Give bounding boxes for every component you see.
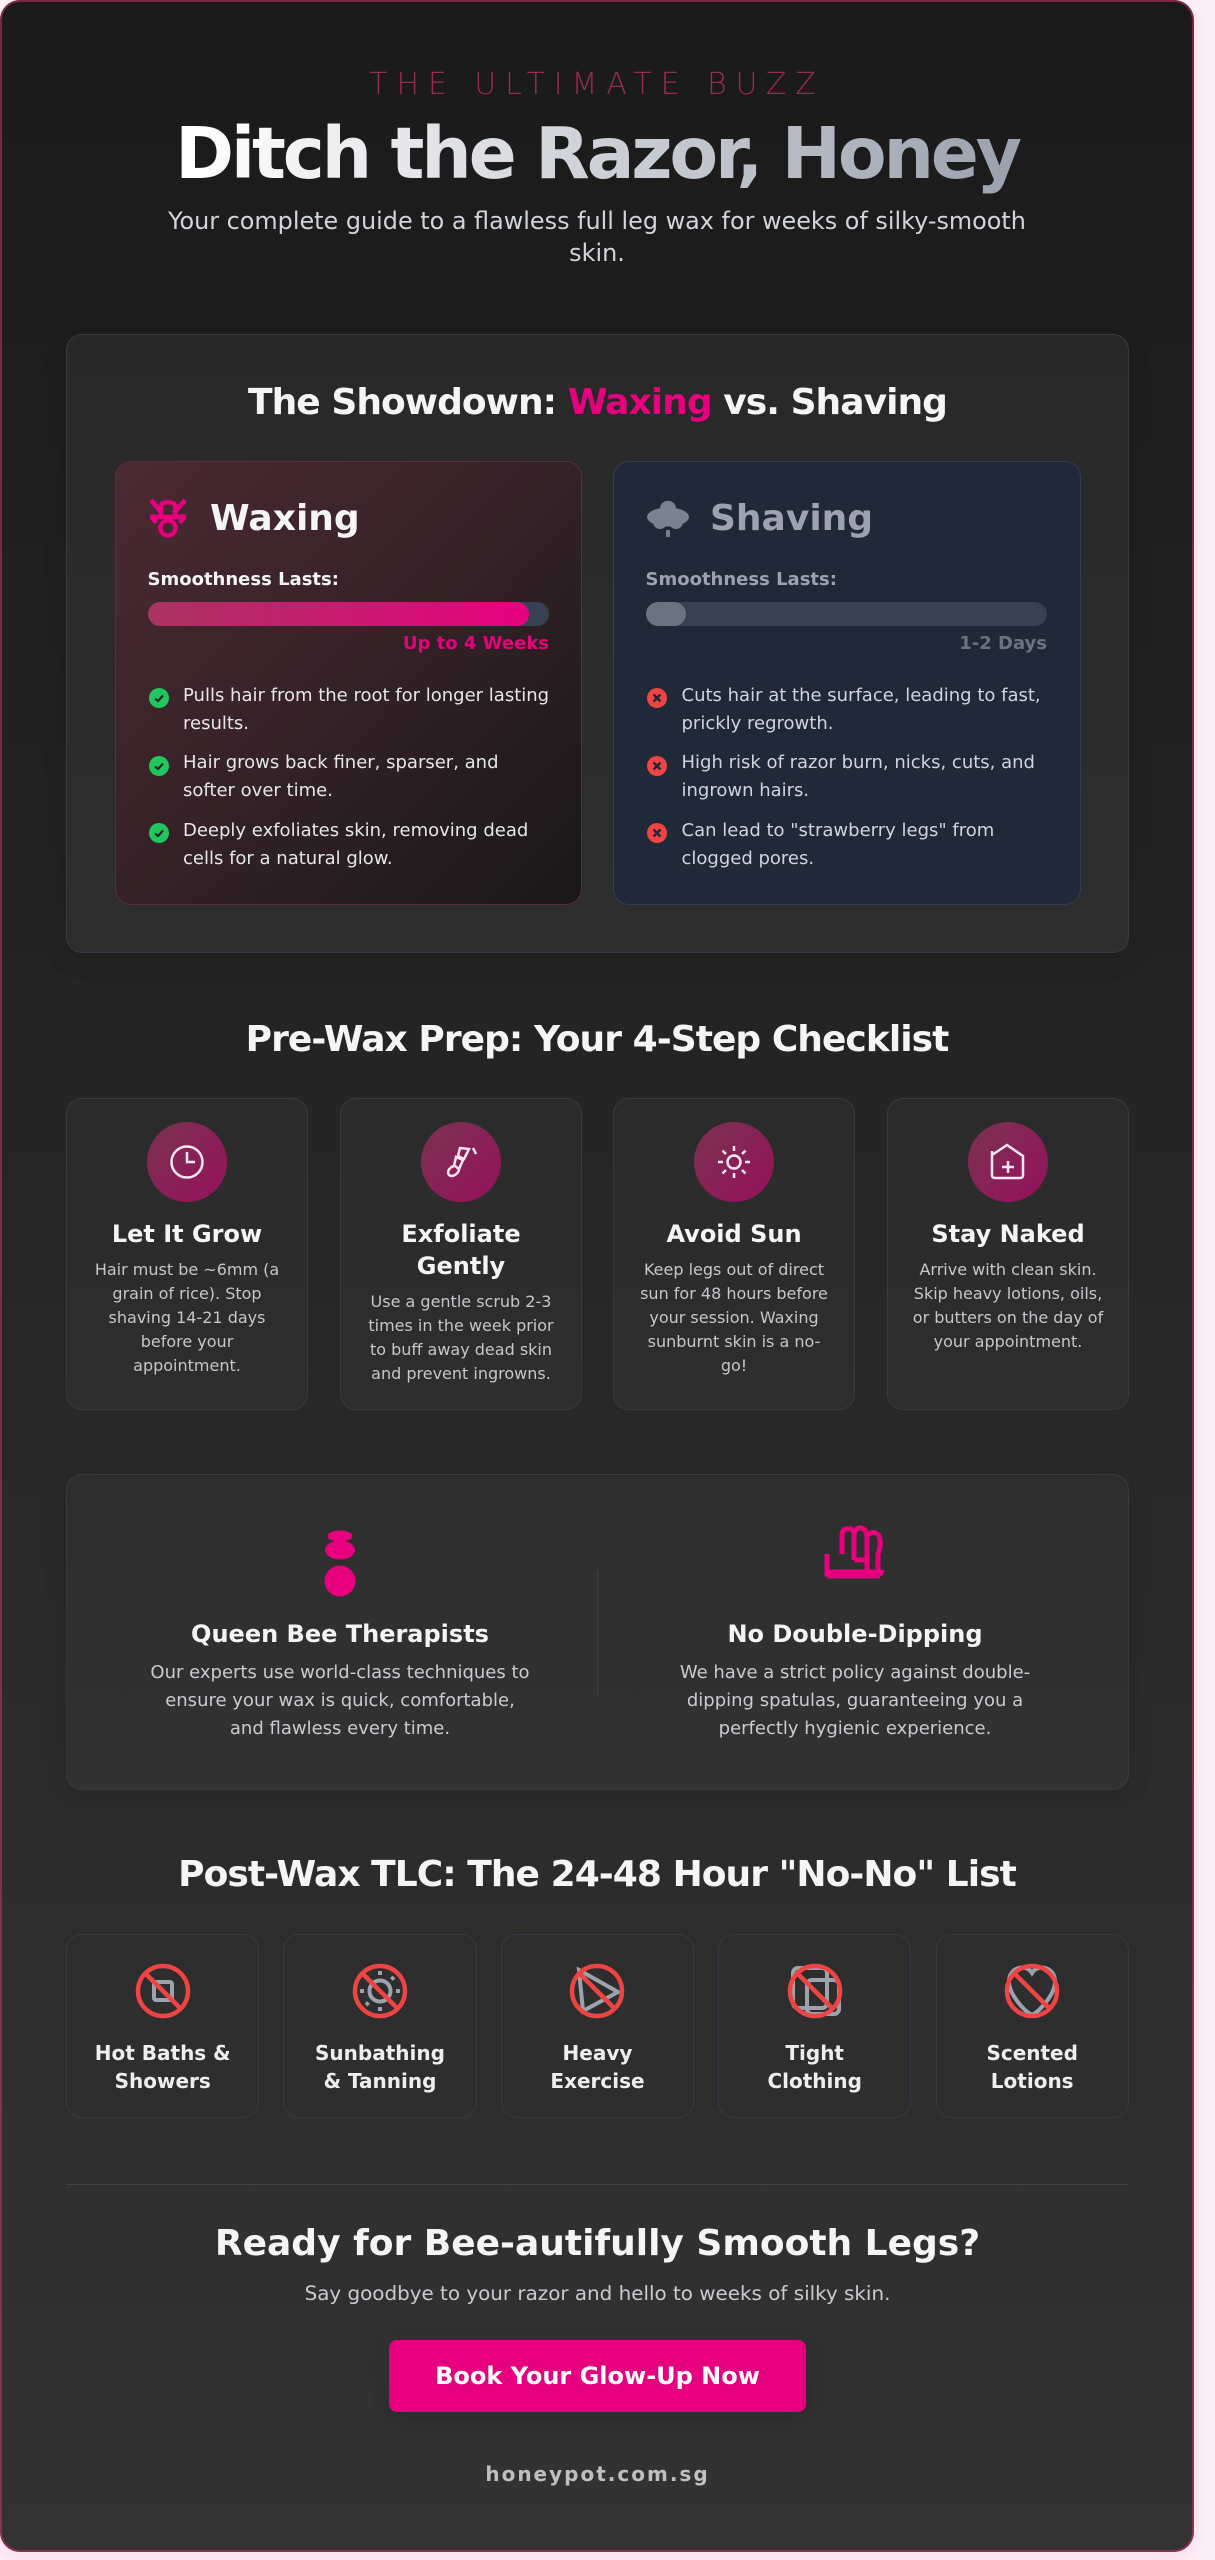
step description: or butters on the day of [913, 1308, 1103, 1327]
waxing title: Waxing [210, 498, 360, 538]
step title: Exfoliate [401, 1220, 521, 1248]
icon: cross [647, 688, 667, 708]
benefit 1: results. [183, 713, 249, 734]
progress bar: 95% [148, 602, 549, 626]
feature: no double-dipping [680, 1525, 1030, 1738]
step title: Stay Naked [931, 1220, 1085, 1248]
feature title: No Double-Dipping [727, 1620, 983, 1648]
cta heading: Ready for Bee-autifully Smooth Legs? [215, 2223, 980, 2264]
label [986, 2041, 1078, 2093]
panel: trust features [66, 1474, 1129, 1790]
step description: go! [721, 1356, 747, 1375]
no-no: hot baths [66, 1934, 259, 2118]
drawback 3: Can lead to "strawberry legs" from [682, 820, 994, 841]
icon: clock [147, 1122, 227, 1202]
drawback 2: ingrown hairs. [682, 780, 809, 801]
label: Hot Baths & [95, 2041, 231, 2065]
icon: cross [647, 823, 667, 843]
step description: Keep legs out of direct [644, 1260, 824, 1279]
icon: bee [324, 1530, 356, 1596]
feature text [680, 1662, 1030, 1738]
divider [596, 1570, 598, 1698]
feature text: Our experts use world-class techniques to [150, 1662, 530, 1682]
icon: no exercise [570, 1964, 624, 2018]
label: Scented [986, 2041, 1078, 2065]
progress bar: 10% [646, 602, 1047, 626]
label [315, 2041, 445, 2093]
step description: sun for 48 hours before [640, 1284, 828, 1303]
benefit 2: Hair grows back finer, sparser, and [183, 752, 499, 773]
icon: check [149, 756, 169, 776]
icon: sun [694, 1122, 774, 1202]
subtitle: Your complete guide to a flawless full leg wax for weeks of silky-smooth [168, 207, 1026, 235]
benefit 3: Deeply exfoliates skin, removing dead [183, 820, 528, 841]
label [95, 2041, 231, 2093]
drawback 1: Cuts hair at the surface, leading to fast, [682, 684, 1041, 706]
step description [95, 1260, 279, 1375]
feature text: dipping spatulas, guaranteeing you a [687, 1690, 1023, 1710]
heading: post-wax tlc: Post-Wax TLC: The 24-48 Hour "No-No" List [178, 1854, 1016, 1894]
button: Book Your Glow-Up Now [435, 2362, 760, 2390]
step description: before your [141, 1332, 233, 1351]
benefit 2 [183, 752, 499, 801]
icon: no tight clothing [788, 1964, 842, 2018]
icon: no scented lotions [1004, 1964, 1060, 2018]
step title: Let It Grow [112, 1220, 262, 1248]
drawback 2: High risk of razor burn, nicks, cuts, and [682, 752, 1035, 773]
smoothness label: Smoothness Lasts: [148, 569, 339, 590]
feature text [150, 1662, 530, 1738]
step: let it grow [66, 1098, 308, 1410]
label: Showers [115, 2069, 211, 2093]
card: waxing [115, 461, 582, 905]
step description: Arrive with clean skin. [919, 1260, 1097, 1279]
icon: house plus [968, 1122, 1048, 1202]
icon: check [149, 688, 169, 708]
benefit 2: softer over time. [183, 780, 333, 801]
cta text: Say goodbye to your razor and hello to weeks of silky skin. [305, 2282, 890, 2305]
shaving title: Shaving [710, 498, 873, 538]
benefit 3 [183, 820, 528, 869]
step description: your session. Waxing [649, 1308, 819, 1327]
benefit 1 [183, 684, 549, 734]
benefit 3: cells for a natural glow. [183, 848, 393, 869]
drawback 1 [682, 684, 1041, 734]
card: shaving [613, 461, 1080, 905]
feature title: Queen Bee Therapists [191, 1620, 489, 1648]
heading: pre-wax prep: Pre-Wax Prep: Your 4-Step Checklist [246, 1018, 948, 1060]
step description: times in the week prior [368, 1316, 554, 1335]
step description: sunburnt skin is a no- [648, 1332, 820, 1351]
subtitle: skin. [569, 239, 625, 267]
feature text: perfectly hygienic experience. [719, 1718, 991, 1738]
step description: Hair must be ~6mm (a [95, 1260, 279, 1279]
step: stay naked [887, 1098, 1129, 1410]
drawback 3 [682, 820, 994, 869]
drawback 2 [682, 752, 1035, 801]
icon: no hot baths [136, 1964, 190, 2018]
icon: check [149, 823, 169, 843]
header [168, 66, 1026, 267]
label [767, 2041, 862, 2093]
drawback 1: prickly regrowth. [682, 713, 833, 734]
panel: the showdown [66, 334, 1129, 953]
duration: shaving: 1-2 Days [959, 633, 1047, 654]
label: & Tanning [324, 2069, 436, 2093]
step description: grain of rice). Stop [112, 1284, 262, 1303]
subtitle [168, 207, 1026, 267]
feature: queen bee therapists [150, 1530, 530, 1738]
footer url: honeypot.com.sg [485, 2462, 710, 2486]
step description [913, 1260, 1104, 1351]
no-no: heavy exercise [501, 1934, 694, 2118]
icon: no sun [352, 1964, 408, 2018]
benefit 1: Pulls hair from the root for longer lasting [183, 684, 549, 706]
step title [401, 1220, 521, 1280]
showdown heading: The Showdown: Waxing vs. Shaving [248, 382, 947, 422]
icon: brush [421, 1122, 501, 1202]
drawback 3: clogged pores. [682, 848, 814, 869]
label: Sunbathing [315, 2041, 445, 2065]
step description [640, 1260, 828, 1375]
step description: Use a gentle scrub 2-3 [371, 1292, 551, 1311]
label: Heavy [563, 2041, 632, 2065]
step title: Avoid Sun [666, 1220, 802, 1248]
step description: to buff away dead skin [370, 1340, 552, 1359]
no-no: scented lotions [936, 1934, 1129, 2118]
smoothness label: Smoothness Lasts: [646, 569, 837, 590]
feature text: ensure your wax is quick, comfortable, [165, 1690, 515, 1710]
step title: Gently [417, 1252, 505, 1280]
call to action [66, 2184, 1129, 2504]
no-no: sunbathing [283, 1934, 477, 2118]
step description: your appointment. [934, 1332, 1082, 1351]
label: Clothing [767, 2069, 862, 2093]
label: Lotions [991, 2069, 1074, 2093]
kicker: THE ULTIMATE BUZZ [369, 66, 825, 102]
step: exfoliate gently [340, 1098, 582, 1410]
label: Tight [785, 2041, 844, 2065]
step description: appointment. [133, 1356, 241, 1375]
step description: and prevent ingrowns. [371, 1364, 551, 1383]
icon: hand [824, 1525, 884, 1578]
icon: cross [647, 756, 667, 776]
button [389, 2340, 806, 2412]
step description [368, 1292, 554, 1383]
feature text: and flawless every time. [230, 1718, 450, 1738]
step: avoid sun [613, 1098, 855, 1410]
feature text: We have a strict policy against double- [680, 1662, 1030, 1682]
no-no: tight clothing [718, 1934, 911, 2118]
step description: Skip heavy lotions, oils, [914, 1284, 1102, 1303]
duration: waxing: Up to 4 Weeks [403, 633, 549, 654]
main title: Ditch the Razor, Honey [175, 112, 1019, 195]
icon: waxing [149, 498, 187, 538]
step description: shaving 14-21 days [109, 1308, 265, 1327]
icon: shaving [647, 500, 689, 537]
label: Exercise [550, 2069, 645, 2093]
label [550, 2041, 645, 2093]
